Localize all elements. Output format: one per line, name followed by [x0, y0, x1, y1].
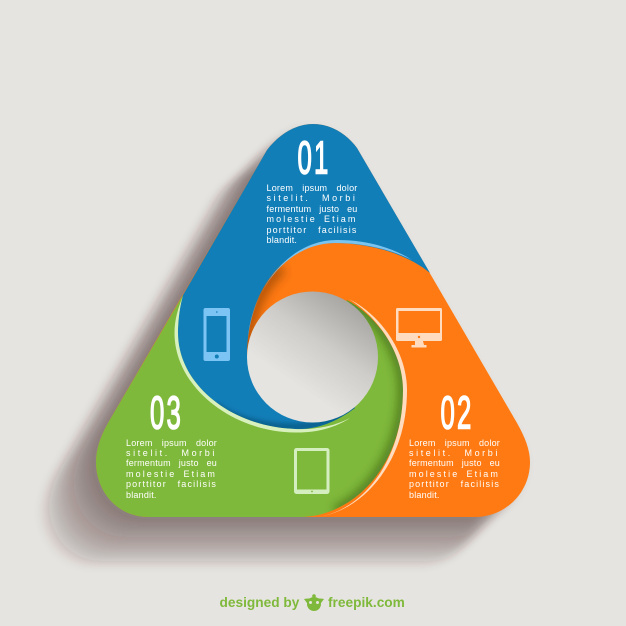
- text block: 03: fermentum justo eu: [126, 458, 217, 468]
- text block: 01: Lorem ipsum dolor: [266, 183, 358, 193]
- text block: 02: fermentum justo eu: [409, 458, 500, 468]
- icon: desktop monitor: [396, 308, 442, 348]
- icon: tablet: [296, 450, 328, 494]
- text block: 03: molestie Etiam: [126, 469, 217, 479]
- footer logo icon: [304, 594, 324, 611]
- number 03: 03: [150, 387, 183, 438]
- centre hole: [247, 292, 378, 422]
- text block: 03: [126, 438, 217, 500]
- panel: green segment 03: [96, 295, 407, 517]
- text block: 03: Lorem ipsum dolor: [126, 438, 217, 448]
- text block: 01: sitelit. Morbi: [266, 193, 358, 203]
- text block: 01: fermentum justo eu: [266, 204, 358, 214]
- text block: 02: blandit.: [409, 490, 440, 500]
- text block: 02: porttitor facilisis: [409, 479, 500, 489]
- text block: 03: sitelit. Morbi: [126, 448, 217, 458]
- text block: 02: [409, 438, 500, 500]
- text block: 02: Lorem ipsum dolor: [409, 438, 500, 448]
- text block: 01: blandit.: [266, 235, 297, 245]
- text block: 01: molestie Etiam: [266, 214, 358, 224]
- footer credit: designed by: designed by: [220, 595, 299, 610]
- panel: blue segment 01: [174, 124, 430, 433]
- text block: 02: molestie Etiam: [409, 469, 500, 479]
- text block: 03: porttitor facilisis: [126, 479, 217, 489]
- text block: 02: sitelit. Morbi: [409, 448, 500, 458]
- panel: orange segment 02: [96, 124, 530, 517]
- long drop shadow: [40, 126, 528, 567]
- icon: smartphone: [204, 308, 230, 361]
- number 01: 01: [297, 132, 331, 183]
- text block: 03: blandit.: [126, 490, 157, 500]
- number 02: 02: [440, 387, 474, 438]
- footer credit: freepik.com: freepik.com: [328, 595, 405, 610]
- text block: 01: [266, 183, 358, 245]
- text block: 01: porttitor facilisis: [266, 225, 358, 235]
